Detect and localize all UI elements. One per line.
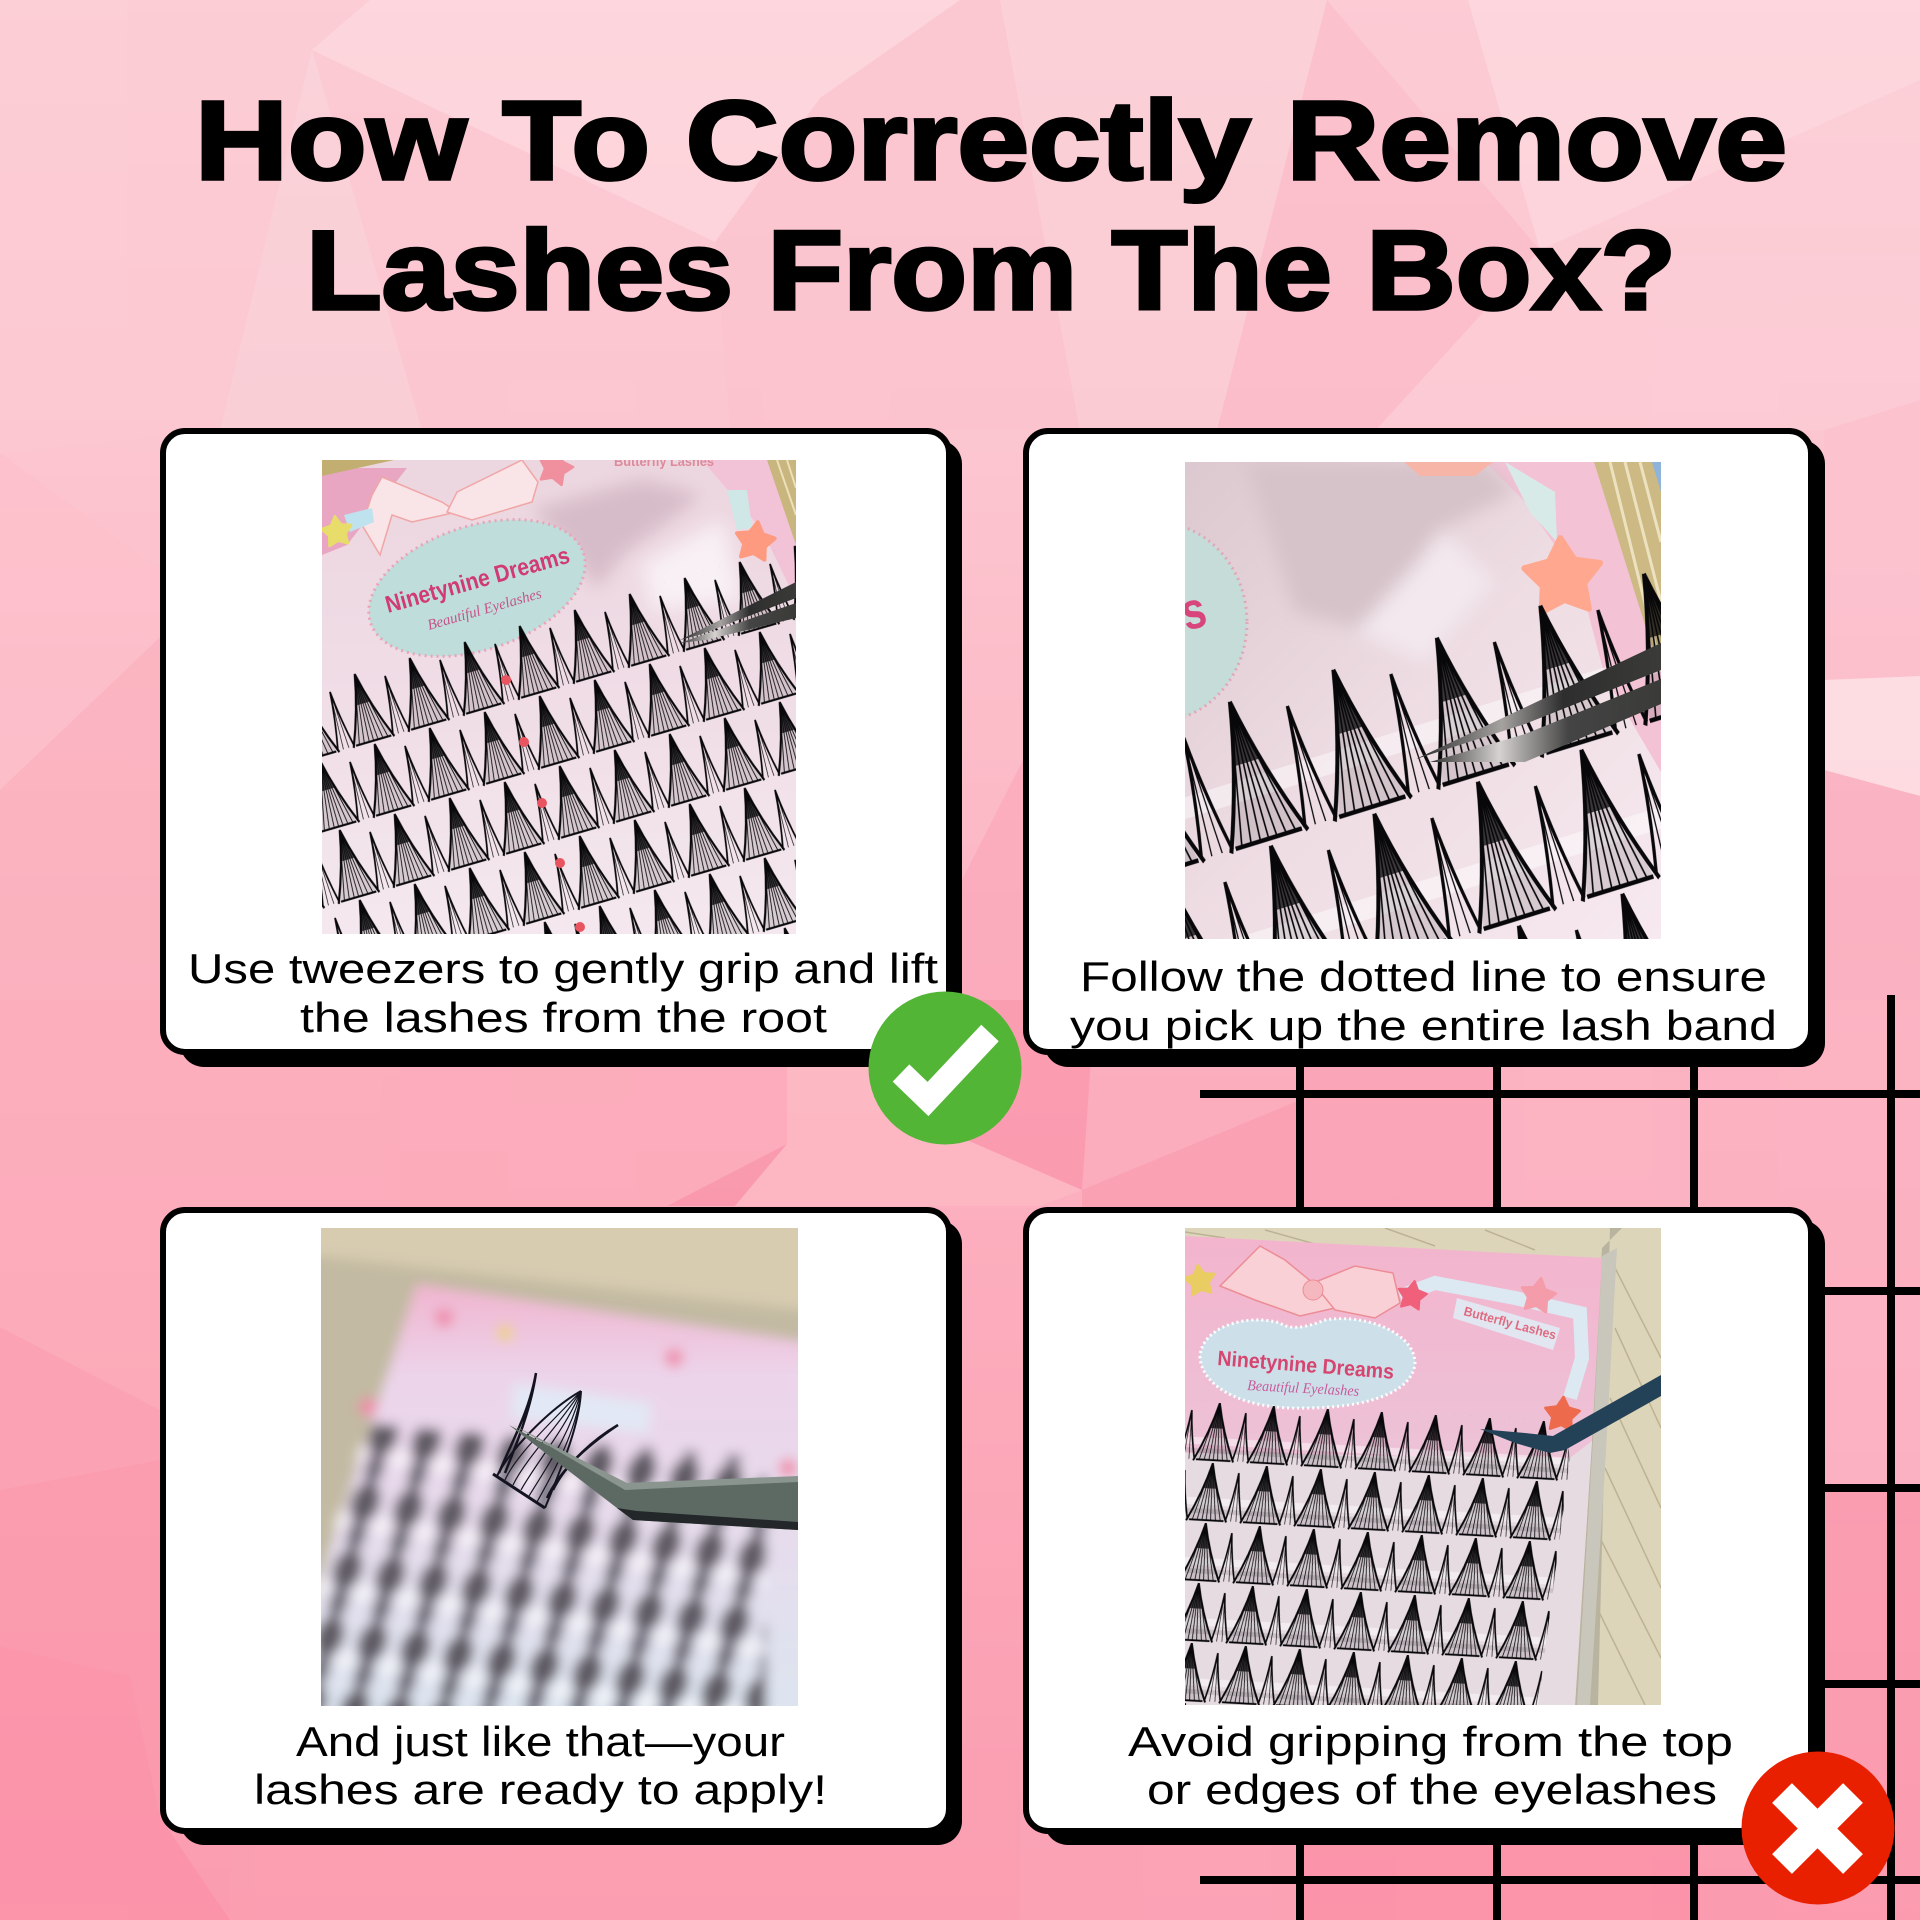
caption bbox=[188, 945, 938, 1041]
caption bbox=[254, 1718, 827, 1813]
lash rows bbox=[1185, 1400, 1570, 1705]
icon: red cross badge bbox=[1742, 1752, 1894, 1904]
caption: or edges of the eyelashes bbox=[1147, 1766, 1717, 1813]
tweezers bbox=[680, 582, 796, 640]
lash rows bbox=[1185, 566, 1661, 939]
photo: single lash held in tweezers bbox=[321, 1228, 798, 1706]
teal logo cloud bbox=[1063, 522, 1247, 722]
photo: tweezers lifting lash from box: Butterfly Lashes bbox=[614, 453, 714, 469]
panel: step 3 lashes ready bbox=[163, 1198, 962, 1845]
tweezers bbox=[1416, 643, 1661, 759]
caption: the lashes from the root bbox=[300, 994, 827, 1041]
logo text: Ninetynine Dreams bbox=[382, 542, 573, 619]
sparkly lower tray bbox=[1185, 1441, 1592, 1705]
decorative black grid lines bbox=[1200, 995, 1920, 1920]
photo: wrong grip on lash tips: Butterfly Lashes bbox=[1462, 1303, 1558, 1342]
caption: Use tweezers to gently grip and lift bbox=[188, 945, 938, 992]
panel: step 1 tweezers grip bbox=[163, 431, 962, 1067]
caption: And just like that—your bbox=[296, 1718, 785, 1765]
caption: Follow the dotted line to ensure bbox=[1080, 953, 1767, 1000]
tweezers bbox=[509, 1425, 798, 1530]
icon: green check badge bbox=[868, 992, 1022, 1144]
caption bbox=[1128, 1718, 1733, 1813]
title: How To Correctly Remove bbox=[195, 78, 1787, 203]
logo text: Ninetynine Dreams bbox=[1217, 1347, 1395, 1384]
lash cluster bbox=[493, 1373, 618, 1508]
photo: wrong grip on lash tips: Beautiful Eyelashes bbox=[1247, 1378, 1360, 1400]
butterfly label bbox=[1453, 1298, 1560, 1350]
caption: you pick up the entire lash band bbox=[1070, 1002, 1777, 1049]
photo: tweezers lifting lash from box: Beautiful Eyelashes bbox=[426, 586, 544, 634]
caption: lashes are ready to apply! bbox=[254, 1766, 827, 1813]
star bbox=[1522, 535, 1603, 613]
caption: Avoid gripping from the top bbox=[1128, 1718, 1733, 1765]
tweezers bbox=[1480, 1375, 1661, 1453]
photo: wrong grip on lash tips bbox=[1185, 1228, 1661, 1705]
caption bbox=[1070, 953, 1777, 1049]
panel: step 2 follow dotted line bbox=[1026, 431, 1825, 1067]
logo cloud bbox=[1200, 1319, 1415, 1408]
title: Lashes From The Box? bbox=[306, 208, 1676, 333]
box bow artwork bbox=[362, 460, 538, 555]
photo: tweezers lifting lash from box bbox=[322, 453, 796, 934]
panel: step 4 avoid gripping bbox=[1026, 1210, 1825, 1845]
title bbox=[195, 78, 1787, 333]
teal logo cloud bbox=[351, 494, 603, 682]
photo: tweezers close up on lash band: ms bbox=[1138, 580, 1212, 652]
lash rows bbox=[322, 544, 796, 934]
photo: tweezers close up on lash band bbox=[1138, 462, 1661, 939]
bow artwork bbox=[1220, 1246, 1400, 1318]
